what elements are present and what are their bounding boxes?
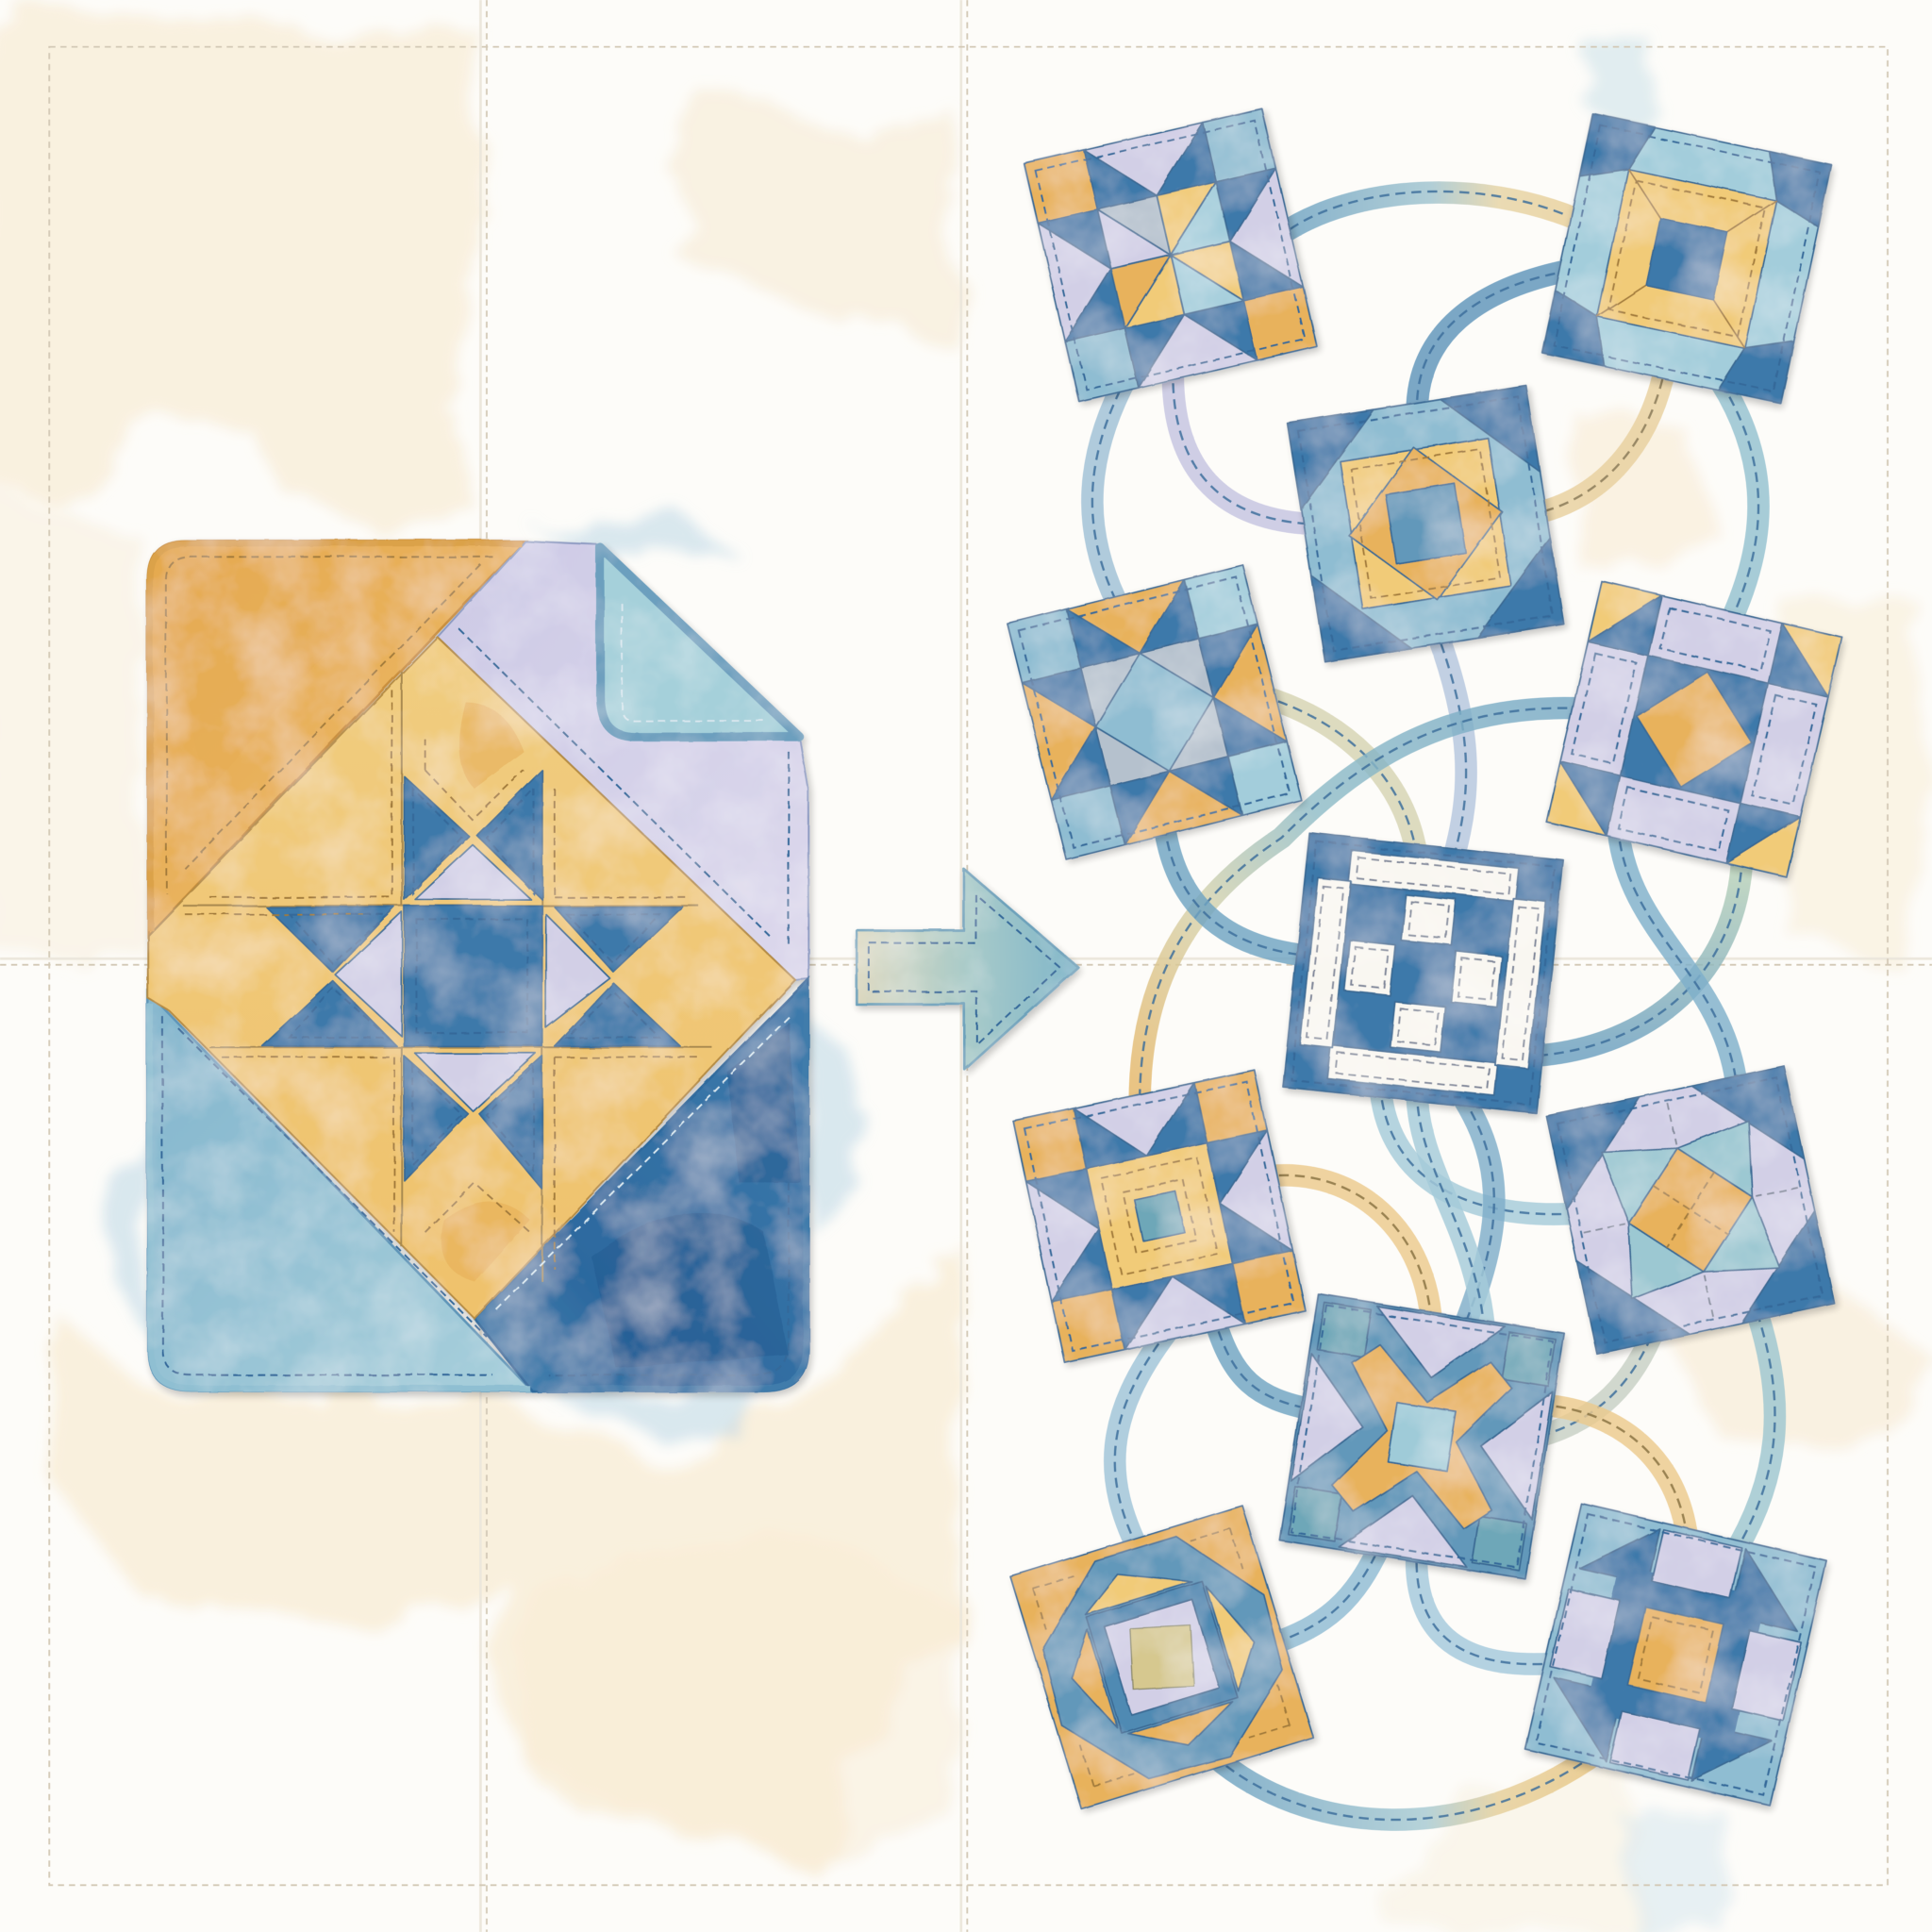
block 11: shoofly with lavender squares: [1525, 1504, 1826, 1806]
strand: tan middle: [1263, 696, 1417, 857]
block 6: central white and blue nine patch: [1283, 833, 1563, 1113]
block 5: lavender bars with yellow diamond: [1546, 582, 1842, 877]
strand: middle to bottom right: [1417, 1546, 1555, 1664]
document: eight-point star: [262, 770, 683, 1189]
strand: right block to center: [1534, 857, 1742, 1056]
document: yellow diamond: [148, 637, 794, 1319]
strand: lower left loop: [1115, 1331, 1168, 1553]
connecting strands: [1092, 192, 1774, 1820]
large quilted document patch: [148, 541, 808, 1391]
document: orange corner: [148, 541, 525, 935]
block 1: sawtooth pinwheel star: [1024, 108, 1317, 401]
document: rim bands: [150, 543, 806, 1389]
block 3: diamond in square: [1288, 386, 1564, 662]
strand: extra center loop: [1417, 1091, 1485, 1337]
strand: tan arc: [1534, 363, 1666, 514]
strand: right lower loop: [1731, 1312, 1774, 1558]
block 2: framed square with dark corners: [1542, 114, 1831, 404]
strand: bottom arc: [1214, 1750, 1602, 1820]
strand: under middle block: [1436, 628, 1466, 857]
arrow: document to blocks: [857, 869, 1078, 1070]
strand: left loop: [1092, 375, 1127, 616]
block 4: star with teal diamond: [1008, 565, 1302, 859]
strand: center to lower middle: [1454, 1084, 1494, 1337]
document: diamond seams: [182, 672, 712, 1281]
document: folded corner: [600, 547, 800, 737]
strand: tan lower right arc: [1541, 1405, 1688, 1546]
strand: middle to bottom left: [1269, 1541, 1382, 1645]
document: light blue corner: [148, 991, 532, 1391]
strand: tan lower arc: [1263, 1175, 1432, 1331]
strand: faded lower right: [1534, 1337, 1651, 1438]
strand: top arc: [1281, 192, 1577, 234]
strand: lower left to middle: [1214, 1316, 1312, 1409]
document: lavender band: [438, 541, 808, 979]
strand: right block down: [1618, 825, 1738, 1091]
document: stitching: [162, 557, 789, 1375]
document: dark blue corner: [475, 978, 808, 1391]
strand: top right arc: [1417, 271, 1565, 413]
strand: center to lower right: [1380, 1084, 1574, 1214]
strand: right loop: [1713, 370, 1758, 628]
strand: left to center: [1164, 825, 1312, 957]
strand: long sweep: [1140, 708, 1583, 1103]
block 10: octagon ring with tan centre: [1010, 1506, 1313, 1808]
block 9: yellow X star with teal corners: [1279, 1294, 1564, 1579]
strand: lavender arc: [1173, 367, 1306, 524]
block 7: star with framed centre: [1013, 1070, 1306, 1362]
document: darker water marks: [182, 577, 530, 1281]
block 8: eight-point star with yellow diamond: [1546, 1066, 1835, 1354]
